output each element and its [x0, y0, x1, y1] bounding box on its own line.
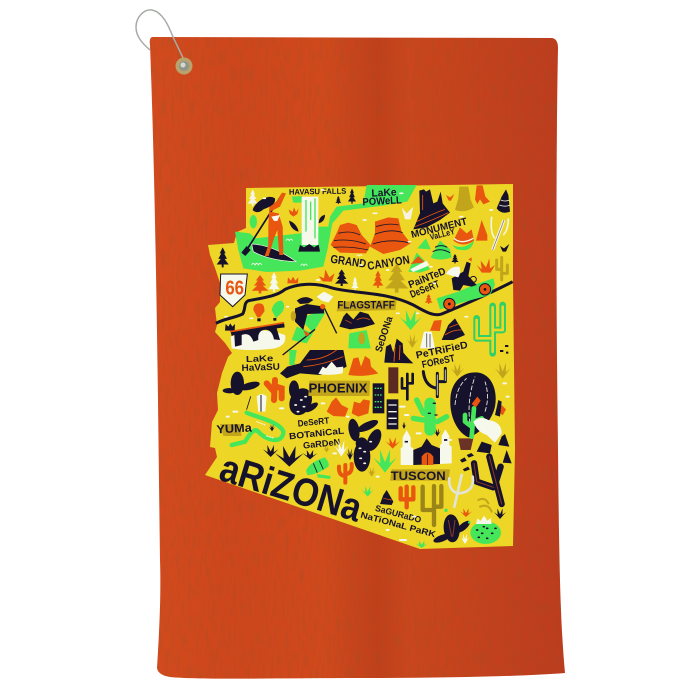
mustard blotches [478, 499, 492, 512]
brown saguaro [474, 457, 502, 504]
Havasu Falls label: HAVASU FALLS [289, 187, 347, 197]
hook wire [136, 10, 185, 62]
Route 66 sign [220, 274, 247, 307]
dark pear with dots [285, 380, 319, 419]
Grand Canyon label: GRAND [330, 253, 367, 271]
Painted Desert label: DeSeRT [409, 279, 442, 301]
green barrel cactus with white flower [470, 516, 501, 544]
Desert Botanical Garden label: BOTaNiCaL [288, 426, 345, 441]
Lake Havasu label: LaKe [246, 353, 274, 364]
dark grass plants [263, 424, 317, 467]
Tuscon label: TUSCON [391, 469, 446, 483]
dark crown [225, 323, 235, 331]
Route 66 highway [216, 282, 513, 323]
mustard plant [407, 334, 418, 348]
grey white cactus [449, 475, 473, 507]
Flagstaff label: FLAGSTAFF [337, 300, 395, 312]
skyscrapers [373, 367, 398, 429]
grommet [176, 58, 192, 74]
dark plants [346, 422, 441, 460]
Grand Canyon rocks [331, 217, 411, 254]
green tuft and dark rock [362, 486, 393, 505]
prickly pear dark [223, 372, 261, 395]
petrified forest striped rocks [420, 318, 465, 348]
orange plant [477, 258, 495, 273]
small plants south [415, 508, 506, 548]
Monument Valley butte [413, 189, 450, 229]
Painted Desert label: PaiNTeD [407, 266, 448, 291]
mustard plants [323, 363, 510, 477]
green plant [250, 215, 257, 228]
green car with driver [437, 257, 495, 310]
Phoenix label: PHOENIX [309, 381, 367, 396]
painted desert rocks [408, 220, 487, 273]
dark hot-air balloon with cactus and sheep [450, 372, 506, 450]
Arizona map outline [205, 184, 515, 549]
leaves [289, 207, 325, 232]
Lake Powell label: POWeLL [362, 195, 402, 208]
green cactus [413, 400, 447, 430]
Desert Botanical Garden label: GaRDeN [302, 437, 341, 451]
paddleboarder [241, 193, 296, 262]
mustard saguaro [423, 486, 441, 525]
white plant [335, 440, 348, 457]
Petrified Forest label: FOReST [421, 353, 456, 371]
orange rocks [327, 397, 370, 417]
Sedona dark red rocks [384, 339, 413, 363]
dark dots [500, 345, 508, 354]
Monument Valley label: VaLLeY [429, 226, 456, 242]
orange saguaro [401, 487, 413, 507]
Monument Valley label: MONUMENT [410, 216, 468, 241]
green barrel cactus [306, 457, 331, 479]
Lake Powell label [362, 187, 402, 208]
upper half of the map [216, 185, 513, 363]
squiggles on water [252, 239, 362, 266]
ARIZONA title: aRiZONa [215, 446, 368, 531]
striped white shield [257, 394, 267, 412]
arch bridge [230, 323, 285, 350]
dark prickly pear [347, 418, 384, 472]
Desert Botanical Garden label: DeSeRT [297, 415, 330, 429]
dark striped hive [497, 189, 510, 213]
white ticks [225, 190, 492, 318]
white ticks and blotches [227, 383, 509, 540]
snake [232, 397, 283, 445]
orange crown and plant [287, 269, 335, 283]
Sagurado National Park label [359, 503, 438, 540]
lake and river in green [235, 185, 417, 272]
lower half of the map [215, 340, 512, 548]
small plants [402, 194, 509, 252]
Petrified Forest label: PeTRiFieD [415, 340, 469, 362]
Lake Powell label: LaKe [371, 187, 397, 200]
green panel [348, 330, 371, 348]
orange rock pair [475, 185, 490, 204]
towel [150, 37, 565, 679]
green triangle [417, 238, 431, 249]
Painted Desert label [407, 266, 448, 301]
Petrified Forest label [415, 340, 469, 371]
orange plant [385, 437, 400, 449]
dark trees [335, 188, 356, 204]
mustard cactus [497, 257, 507, 280]
dark saguaro [402, 374, 413, 399]
top green patch [292, 196, 302, 203]
dark rocks [339, 312, 375, 329]
Route 66 sign: 66 [225, 278, 244, 300]
dark prickly pear with green tips [432, 509, 472, 544]
green grass tuft [400, 310, 422, 330]
Lake Havasu label [241, 353, 280, 373]
Grand Canyon label [330, 253, 411, 273]
Grand Canyon label: CANYON [366, 253, 411, 273]
orange cactus [339, 464, 352, 483]
big green outline cactus [477, 305, 503, 353]
waterfall [298, 197, 320, 252]
hot air balloons [253, 301, 284, 321]
Desert Botanical Garden label [288, 415, 345, 451]
green plant [373, 449, 397, 473]
rock mountain [280, 350, 347, 378]
Sagurado National Park label: SaGURaDO [374, 503, 423, 525]
white tree [248, 189, 258, 206]
Yuma label: YUMa [216, 421, 253, 436]
tree near car [451, 254, 459, 263]
orange rock cluster [348, 356, 378, 376]
mustard bell rock [455, 187, 474, 211]
dark rocks right [460, 434, 512, 471]
Sagurado National Park label: NaTiONaL PaRK [359, 510, 438, 540]
Sedona label: SeDONa [374, 315, 396, 354]
dark pine [217, 247, 229, 267]
trees row [252, 263, 408, 293]
mission church [401, 429, 452, 465]
orange tree by road [425, 294, 433, 304]
orange cactus [267, 380, 282, 400]
striped post and white arc [491, 217, 508, 250]
grey cactus [423, 368, 445, 397]
Lake Havasu label: HaVaSU [241, 362, 280, 373]
hiker [283, 292, 337, 355]
